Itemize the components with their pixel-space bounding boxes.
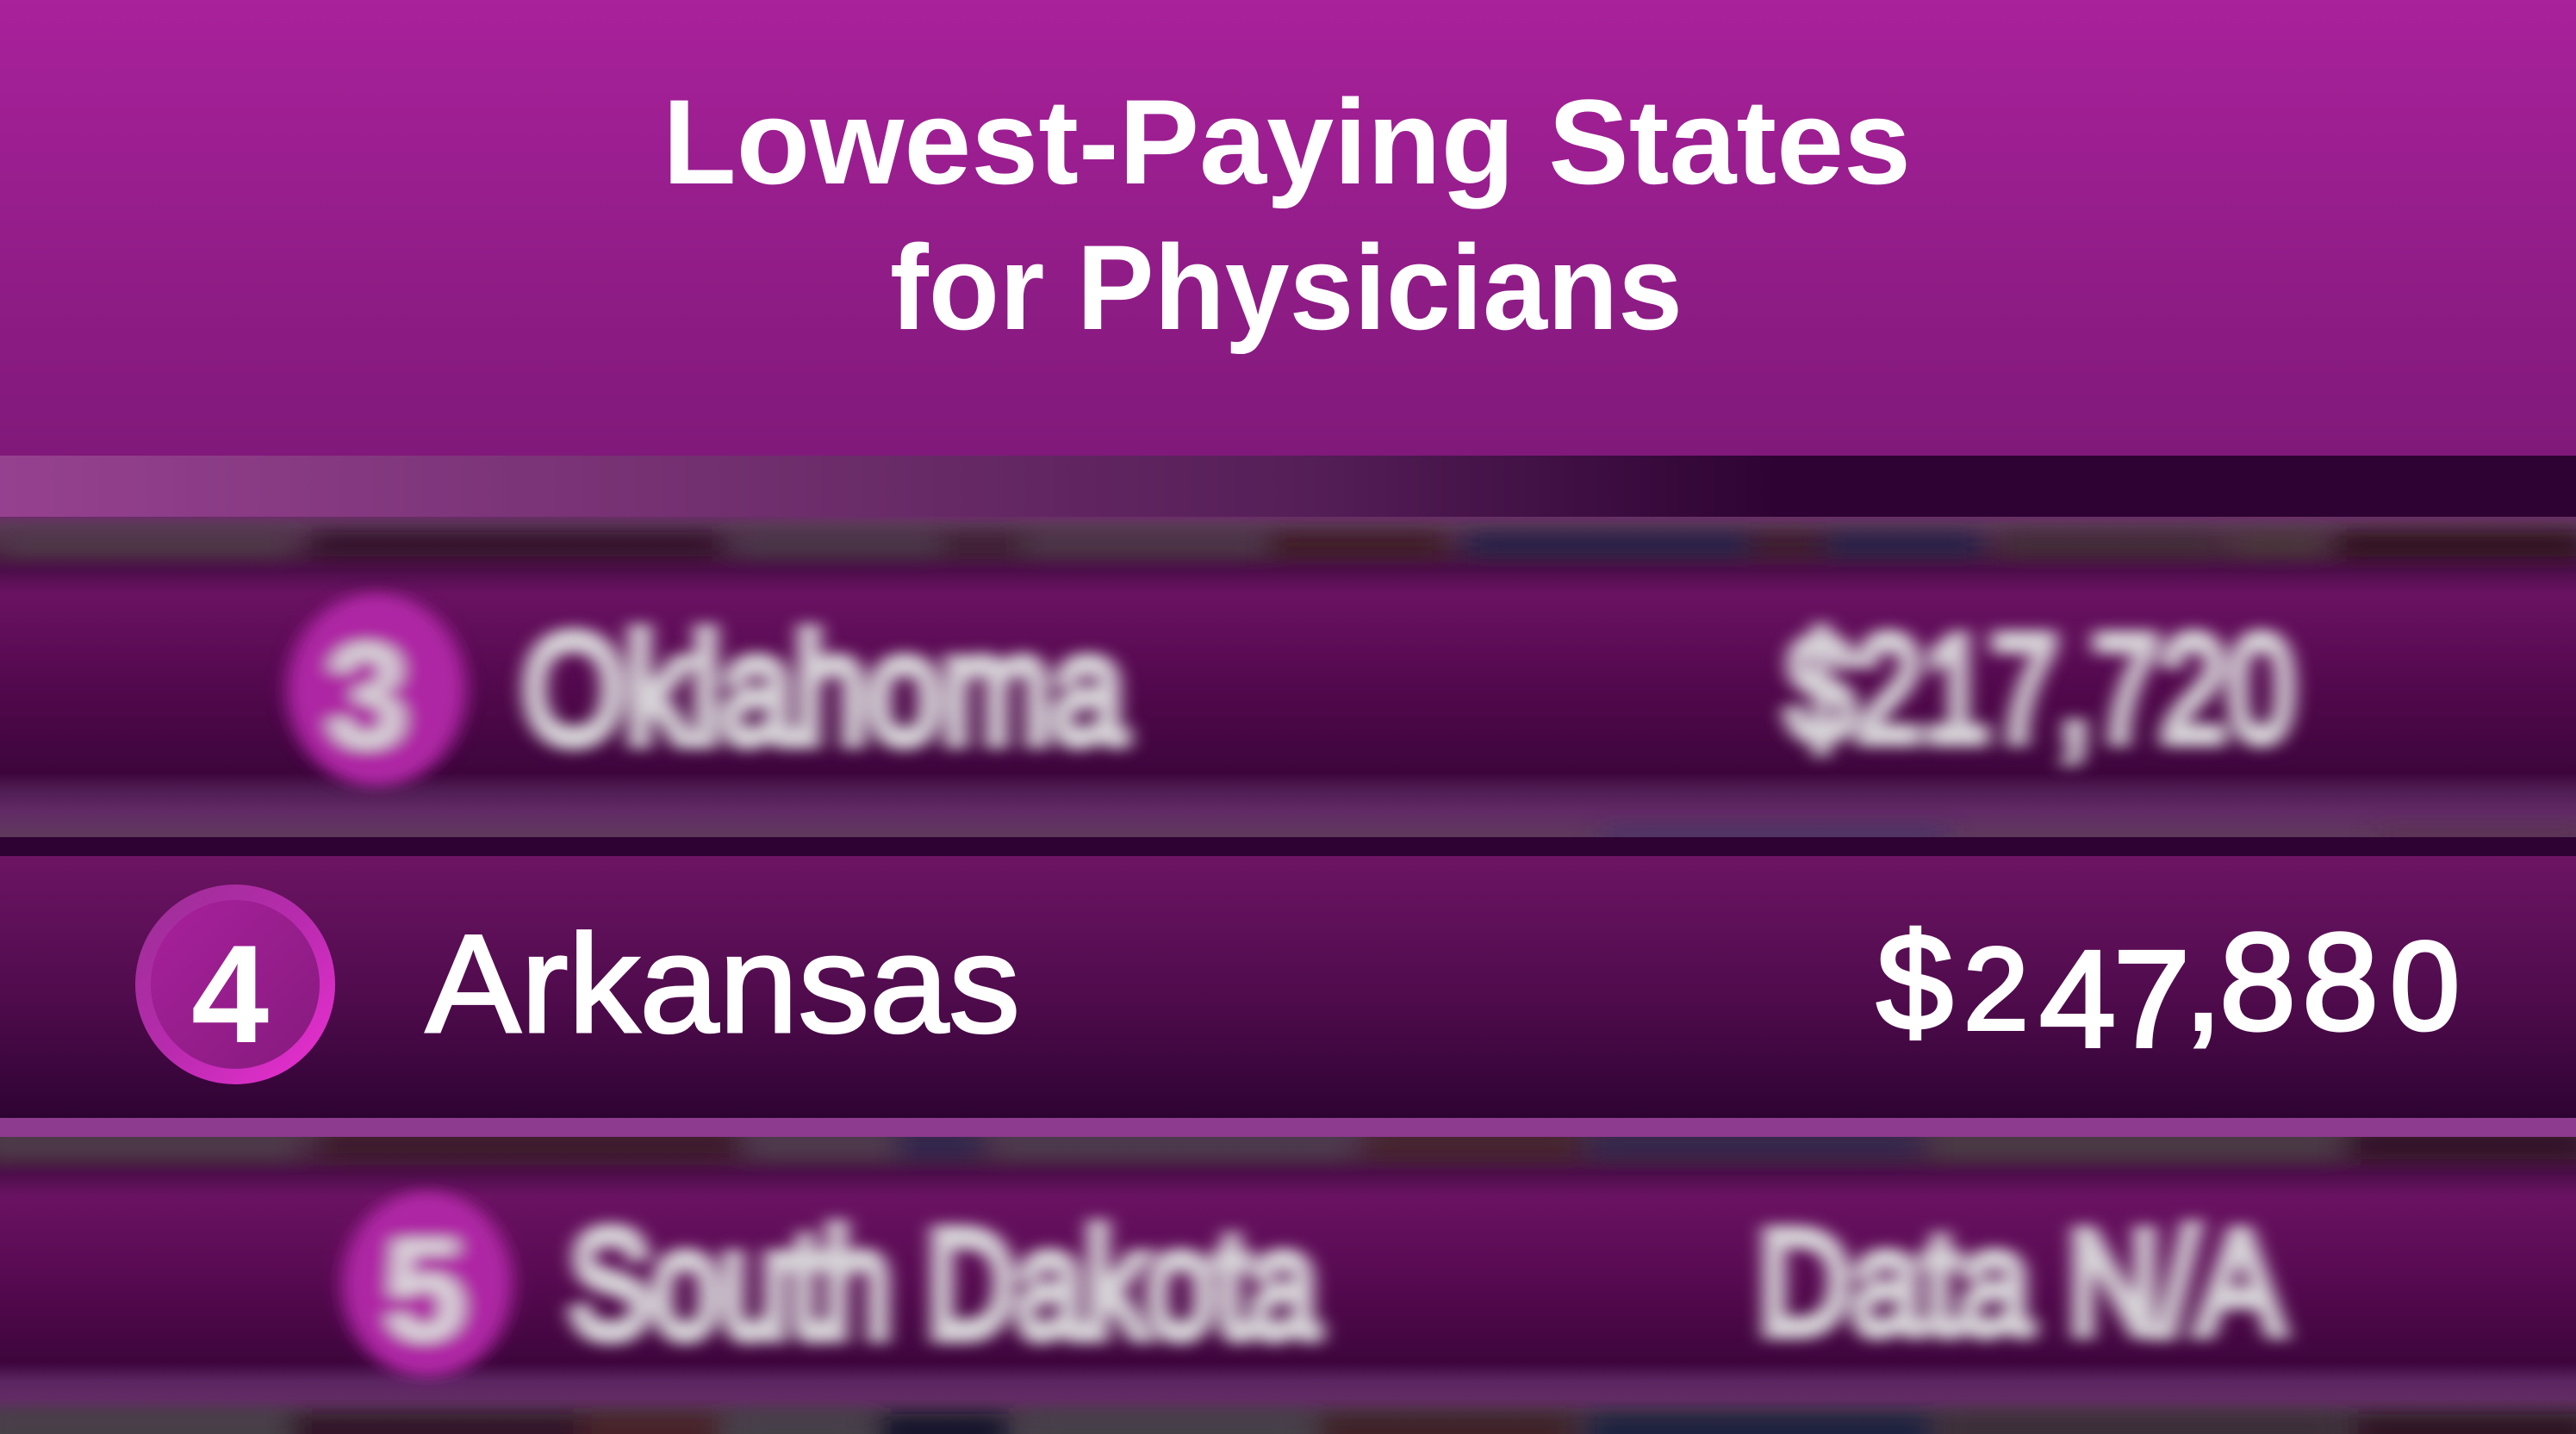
row divider bar — [0, 1118, 2576, 1137]
number badge 4: 4 — [191, 916, 269, 1072]
title: Lowest-Paying States — [663, 74, 1911, 209]
salary: $247,880: 0 — [2390, 916, 2460, 1056]
salary: $247,880: 8 — [2219, 904, 2296, 1058]
header panel — [0, 0, 2576, 456]
salary: $247,880: , — [2184, 904, 2222, 1058]
number badge 5: 5 — [383, 1208, 466, 1372]
salary: $247,880: 8 — [2302, 904, 2379, 1058]
progress strip — [0, 456, 2576, 517]
number badge 3 — [287, 593, 466, 786]
number badge 4 — [135, 885, 335, 1084]
list row 3: Oklahoma (blurred) — [0, 517, 2576, 846]
state name: South Dakota: South Dakota — [569, 1198, 1318, 1369]
title: for Physicians — [890, 220, 1683, 355]
salary: $247,880: $ — [1876, 904, 1953, 1058]
list row 4: Arkansas (in focus) — [0, 856, 2576, 1118]
number badge 5 — [342, 1191, 513, 1377]
number badge 3: 3 — [326, 612, 408, 780]
state name: Arkansas: Arkansas — [426, 906, 1020, 1062]
salary: $247,880: 7 — [2113, 922, 2190, 1076]
state name: Oklahoma: Oklahoma — [522, 603, 1126, 776]
salary: $247,880: 4 — [2039, 922, 2116, 1076]
dark gap — [0, 837, 2576, 856]
salary: $217,720: $217,720 — [1787, 605, 2295, 773]
list row 5: South Dakota (blurred) — [0, 1130, 2576, 1434]
title — [663, 74, 1911, 355]
salary: Data N/A: Data N/A — [1758, 1200, 2283, 1365]
salary: $247,880: 2 — [1963, 923, 2029, 1054]
